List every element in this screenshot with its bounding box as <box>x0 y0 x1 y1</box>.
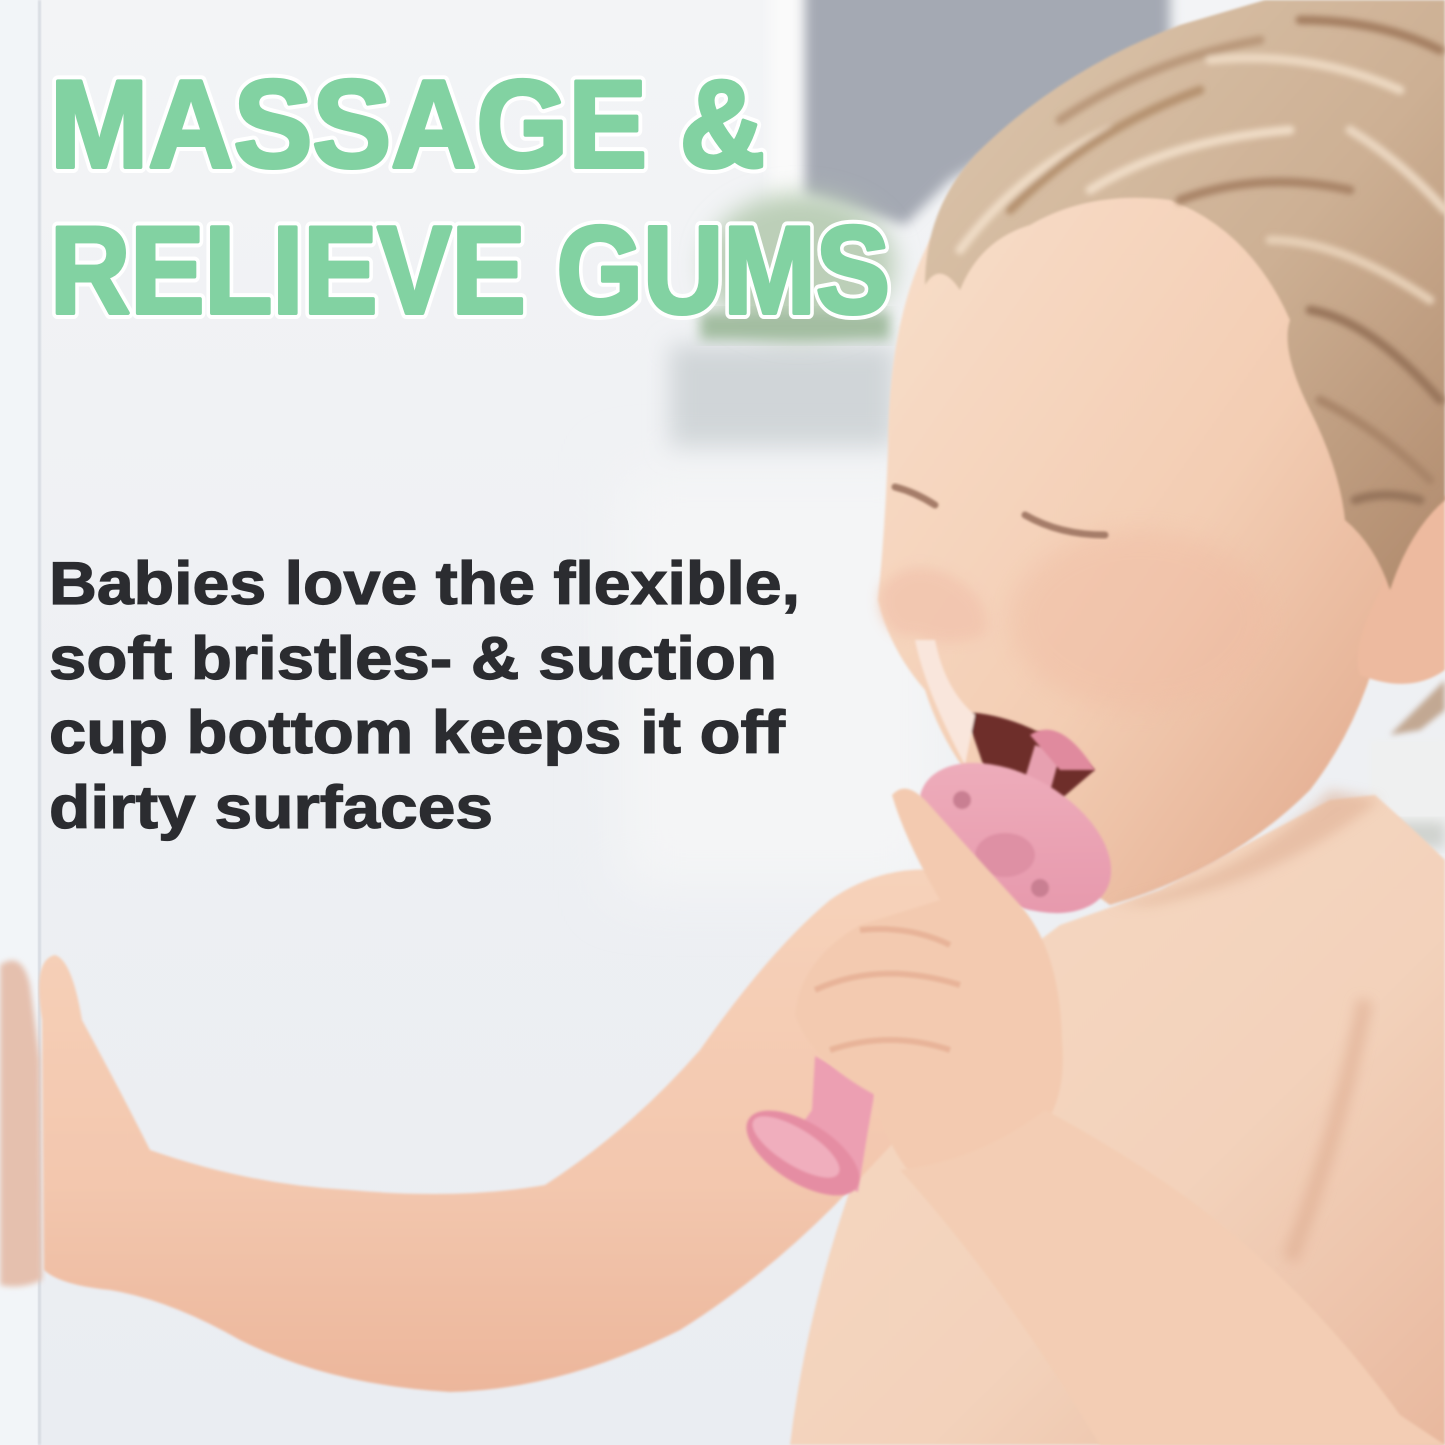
reflected hand at left edge <box>0 960 42 1287</box>
body text <box>49 550 800 841</box>
outstretched arm and hand <box>39 869 990 1392</box>
baby head <box>878 173 1395 905</box>
baby body <box>790 795 1445 1445</box>
body text: soft bristles- & suction <box>49 625 777 692</box>
mouth <box>915 640 1095 800</box>
title: MASSAGE & <box>50 56 765 194</box>
title: RELIEVE GUMS <box>50 202 890 340</box>
body text: Babies love the flexible, <box>49 550 800 617</box>
body text: cup bottom keeps it off <box>49 699 786 766</box>
neck shadow <box>1110 790 1380 905</box>
ear <box>1358 495 1445 684</box>
cheek blush <box>1010 530 1270 710</box>
nose <box>880 568 987 642</box>
toothbrush handle and suction cup <box>733 1056 875 1212</box>
eyes <box>895 487 1105 535</box>
body text: dirty surfaces <box>49 774 493 841</box>
forearm gripping brush <box>900 1110 1445 1445</box>
title: MASSAGE & <box>50 56 765 194</box>
title <box>50 56 890 340</box>
gripping hand <box>795 789 1063 1190</box>
chest and shoulder shading <box>1290 1000 1365 1260</box>
hair <box>925 0 1445 590</box>
toothbrush head with bristles and disc <box>893 730 1137 944</box>
title: RELIEVE GUMS <box>50 202 890 340</box>
